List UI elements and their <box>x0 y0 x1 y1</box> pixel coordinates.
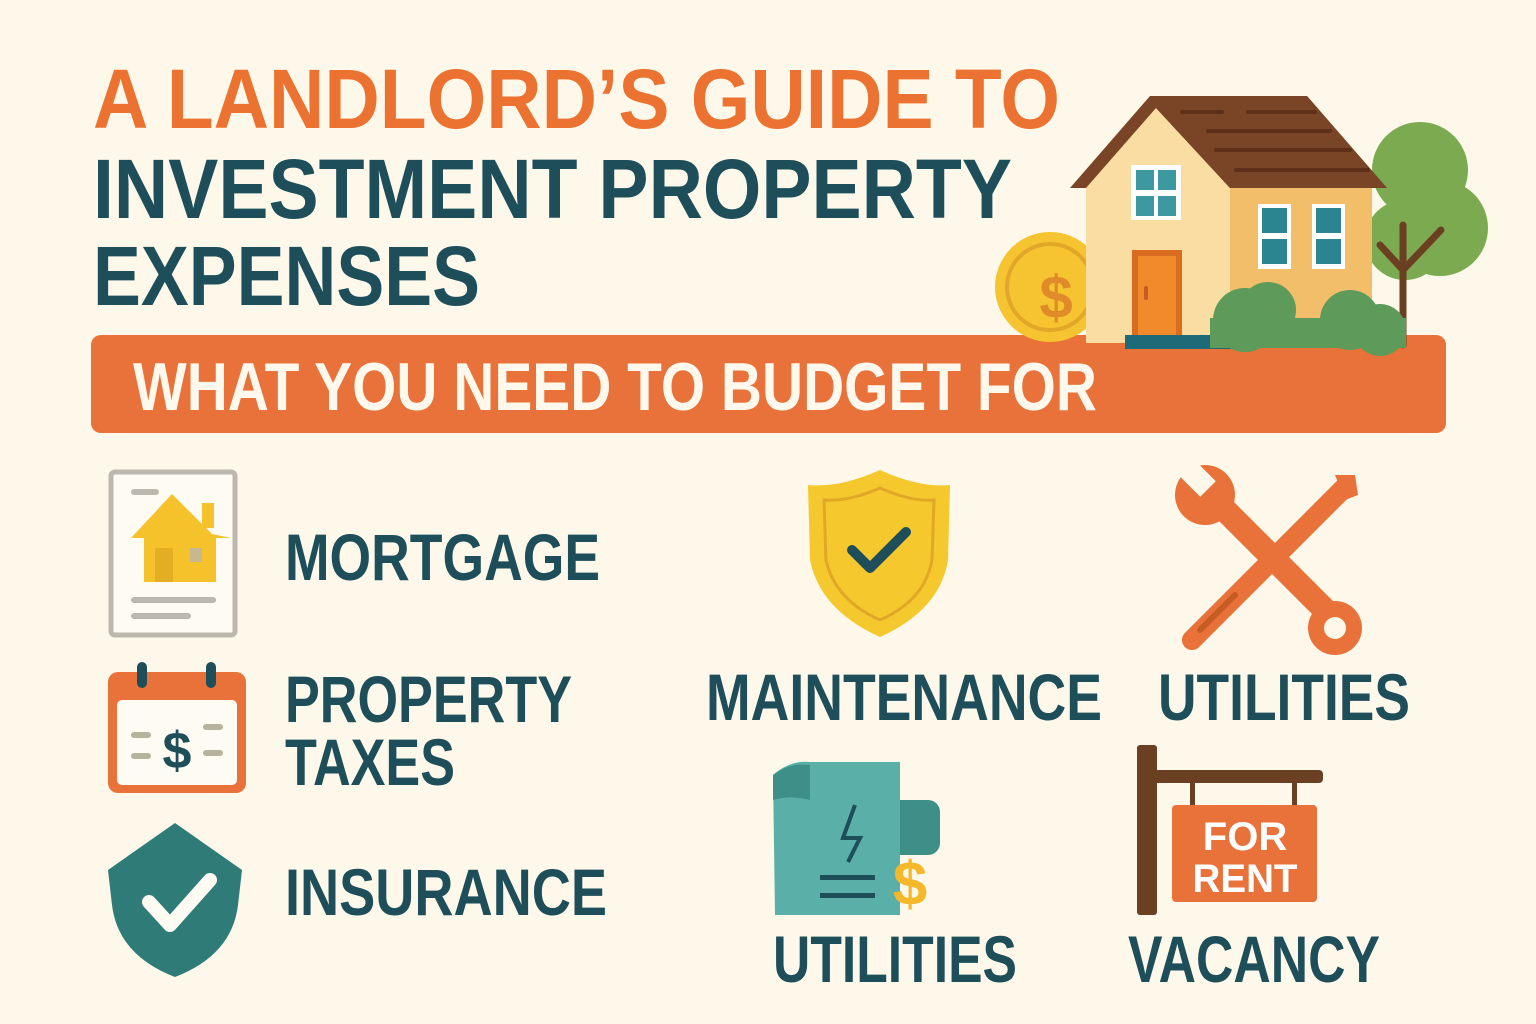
item: utilities top <box>1158 457 1410 734</box>
item: property taxes <box>108 662 572 799</box>
icon: for rent sign: RENT <box>1192 857 1298 901</box>
item: vacancy: VACANCY <box>1128 922 1380 996</box>
banner <box>91 335 1446 433</box>
item: property taxes: TAXES <box>285 725 455 799</box>
icon: tree <box>1365 122 1488 345</box>
item: maintenance <box>706 470 1102 734</box>
icon: utility bill: $ <box>893 850 927 919</box>
icon: shield <box>808 470 950 637</box>
icon: coin: $ <box>1039 264 1073 331</box>
item: insurance: INSURANCE <box>285 855 607 929</box>
item: mortgage <box>111 472 600 635</box>
title: EXPENSES <box>93 229 480 323</box>
title: INVESTMENT PROPERTY <box>93 142 1012 236</box>
icon: calendar <box>108 662 246 793</box>
item: utilities bottom <box>773 762 1017 996</box>
item: insurance <box>108 823 607 977</box>
icon: calendar: $ <box>163 722 192 780</box>
title: A LANDLORD’S GUIDE TO <box>93 52 1060 146</box>
icon: mortgage document <box>111 472 235 635</box>
icon: for rent sign <box>1137 745 1323 915</box>
item: maintenance: MAINTENANCE <box>706 660 1102 734</box>
item: mortgage: MORTGAGE <box>285 520 600 594</box>
item: utilities top: UTILITIES <box>1158 660 1410 734</box>
icon: utility bill <box>773 762 940 919</box>
item: utilities bottom: UTILITIES <box>773 922 1017 996</box>
item: vacancy <box>1128 745 1380 996</box>
item: property taxes: PROPERTY <box>285 662 572 736</box>
title <box>93 52 1060 323</box>
icon: wrench and screwdriver <box>1175 457 1362 655</box>
icon: for rent sign: FOR <box>1203 815 1287 859</box>
illustration: house with coin and trees <box>995 96 1488 356</box>
icon: house shield <box>108 823 242 977</box>
icon: coin <box>995 232 1105 342</box>
banner: WHAT YOU NEED TO BUDGET FOR <box>133 349 1097 425</box>
